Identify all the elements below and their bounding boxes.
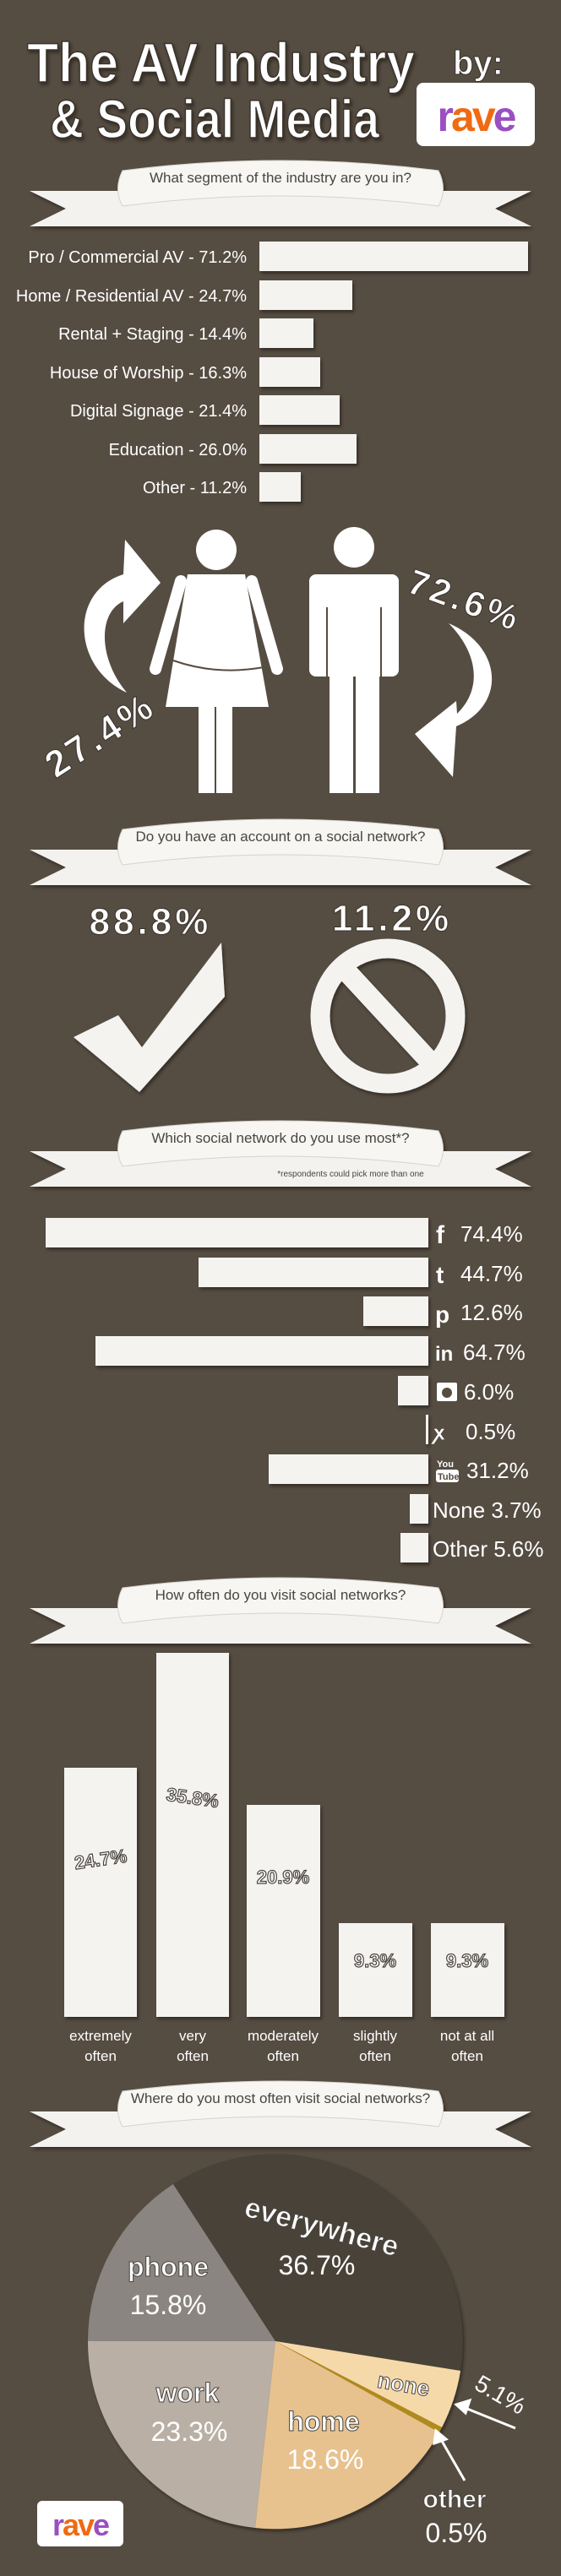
bar chart: industry segment: Rental + Staging - 14.4% [58, 325, 247, 344]
column chart: frequency: often [267, 2048, 299, 2064]
arrow: 0.5% pointer [434, 2431, 465, 2481]
bar chart: social networks: Other 5.6% [433, 1536, 544, 1562]
column chart: frequency: slightly [353, 2028, 397, 2044]
column chart: frequency: 9.3% [446, 1950, 488, 1971]
bar chart: social networks: 44.7% [460, 1261, 523, 1286]
pie chart: location: everywhere [241, 2191, 402, 2264]
logo: rave [417, 83, 535, 146]
stat: yes 88.8%: 88.8% [90, 901, 211, 943]
pie chart: location: 36.7% [279, 2250, 355, 2280]
pie chart: location: home [287, 2406, 360, 2437]
pie chart: location [88, 2154, 531, 2548]
banner: account [30, 819, 531, 885]
banner: location [30, 2081, 531, 2147]
bar chart: social networks: You [437, 1459, 454, 1470]
bar chart: social networks [46, 1218, 544, 1562]
logo: rave footer [37, 2501, 123, 2546]
banner: segment: What segment of the industry are you in? [150, 170, 411, 186]
column chart: frequency: very [179, 2028, 207, 2044]
column chart: frequency: often [84, 2048, 117, 2064]
column chart: frequency: not at all [440, 2028, 494, 2044]
arrow: right [415, 623, 492, 777]
bar chart: social networks: 64.7% [463, 1340, 526, 1365]
pie chart: location: 0.5% [426, 2518, 487, 2548]
bar chart: industry segment: House of Worship - 16.3% [50, 364, 247, 383]
bar chart: social networks: ꭗ [431, 1422, 445, 1444]
banner: frequency: How often do you visit social networks? [155, 1587, 406, 1603]
bar chart: industry segment [16, 242, 528, 502]
bar chart: social networks: 31.2% [466, 1458, 529, 1483]
stat: no 11.2%: 11.2% [332, 898, 452, 939]
logo: rave: rave [438, 93, 516, 140]
column chart: frequency: 35.8% [165, 1784, 221, 1812]
banner: segment [30, 160, 531, 226]
stat: men 72.6%: 72.6% [403, 562, 527, 639]
bar chart: social networks: 12.6% [460, 1300, 523, 1325]
column chart: frequency: often [177, 2048, 209, 2064]
bar chart: industry segment: Home / Residential AV - 24.7% [16, 287, 247, 306]
banner: social network: *respondents could pick more than one [277, 1170, 424, 1179]
column chart: frequency: 9.3% [354, 1950, 396, 1971]
bar chart: social networks: t [436, 1262, 444, 1288]
bar chart: industry segment: Digital Signage - 21.4% [70, 402, 247, 421]
column chart: frequency: 20.9% [257, 1867, 309, 1888]
bar chart: social networks: 74.4% [460, 1221, 523, 1247]
banner: location: Where do you most often visit social networks? [131, 2090, 430, 2106]
bar chart: social networks: in [435, 1343, 453, 1366]
bar chart: social networks: f [436, 1221, 445, 1249]
bar chart: social networks: p [435, 1302, 449, 1328]
arrow: 5.1% pointer [456, 2400, 515, 2428]
title [27, 31, 415, 149]
logo: rave footer: rave [52, 2508, 109, 2542]
title: The AV Industry [27, 31, 415, 94]
pie chart: location: 18.6% [287, 2444, 363, 2475]
stat: women 27.4%: 27.4% [38, 685, 163, 786]
banner: social network [30, 1121, 531, 1187]
bar chart: social networks: 6.0% [464, 1379, 514, 1405]
column chart: frequency: often [359, 2048, 391, 2064]
banner: account: Do you have an account on a social network? [135, 829, 426, 845]
icon: checkmark [74, 943, 225, 1092]
bar chart: industry segment: Education - 26.0% [109, 441, 247, 459]
title: & Social Media [50, 89, 379, 149]
icon: no symbol [320, 948, 455, 1084]
arrow: left [84, 540, 161, 693]
banner: frequency [30, 1578, 531, 1644]
icon: man [309, 527, 399, 793]
column chart: frequency: moderately [248, 2028, 319, 2044]
banner: social network: Which social network do you use most*? [151, 1130, 410, 1146]
pie chart: location: 23.3% [151, 2416, 227, 2447]
column chart: frequency [64, 1653, 504, 2064]
column chart: frequency: extremely [69, 2028, 132, 2044]
bar chart: industry segment: Other - 11.2% [143, 479, 247, 497]
pie chart: location: 5.1% [471, 2370, 531, 2420]
bar chart: social networks: 0.5% [466, 1419, 515, 1444]
byline: by: [453, 45, 504, 82]
pie chart: location: phone [128, 2252, 209, 2282]
pie chart: location: other [422, 2486, 487, 2514]
pie chart: location: work [155, 2378, 220, 2408]
bar chart: industry segment: Pro / Commercial AV - 71.2% [28, 248, 247, 267]
icon: woman [155, 530, 277, 793]
bar chart: social networks: Tube [438, 1472, 459, 1482]
column chart: frequency: 24.7% [73, 1845, 128, 1873]
pie chart: location: 15.8% [130, 2290, 206, 2320]
pie chart: location: none [375, 2367, 432, 2401]
bar chart: social networks: None 3.7% [433, 1497, 542, 1523]
column chart: frequency: often [451, 2048, 483, 2064]
